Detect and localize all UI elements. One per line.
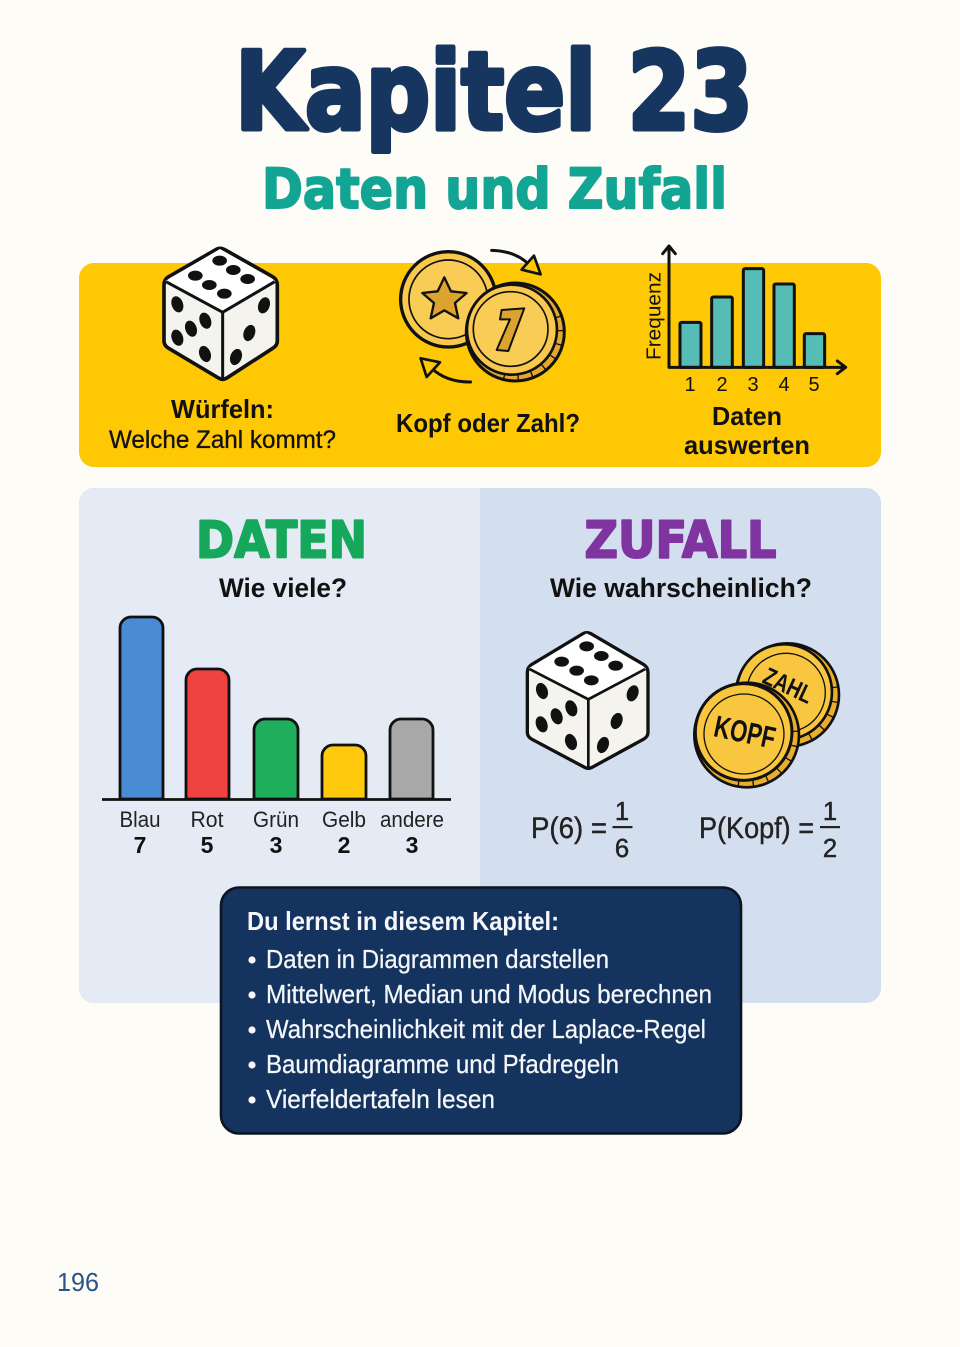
formula: P(6): 1 [615, 796, 629, 826]
formula: P(Kopf): 1 [823, 796, 837, 826]
heading: Zufall: ZUFALL [584, 512, 776, 570]
chart: frequency histogram: 2 [716, 374, 728, 396]
label: data: Daten [712, 401, 782, 431]
chart: frequency histogram [644, 246, 846, 396]
subheading: Daten: Wie viele? [219, 573, 347, 603]
icon: Kopf and Zahl coins: KOPF [711, 710, 778, 756]
subheading: Zufall: Wie wahrscheinlich? [550, 573, 812, 603]
icon: die [164, 248, 277, 379]
bar chart: colours [102, 617, 451, 800]
panel: yellow topic band [79, 263, 881, 467]
bar labels: 3 [270, 832, 282, 858]
formula: P(Kopf): P(Kopf) = [699, 812, 814, 845]
heading: Daten: DATEN [196, 512, 367, 570]
label: data [684, 401, 810, 460]
bar labels: Gelb [322, 807, 366, 832]
bar labels: andere [380, 807, 444, 832]
bar labels: Grün [253, 807, 299, 832]
callout list: Daten in Diagrammen darstellen [266, 944, 609, 974]
chart: frequency histogram: 4 [778, 374, 790, 396]
label: dice [109, 394, 336, 454]
bar labels: Blau [120, 807, 160, 832]
bar labels: 2 [338, 832, 350, 858]
bar labels: 5 [201, 832, 214, 858]
callout list: Baumdiagramme und Pfadregeln [266, 1049, 619, 1079]
callout: learning goals [221, 888, 741, 1134]
callout list: Wahrscheinlichkeit mit der Laplace-Regel [266, 1014, 706, 1044]
formula: P(Kopf) [699, 796, 840, 863]
callout list [248, 944, 712, 1114]
chart: frequency histogram: 5 [808, 374, 820, 396]
formula: P(6) [531, 796, 632, 863]
bar labels [120, 807, 444, 858]
icon: Kopf and Zahl coins: ZAHL [759, 662, 817, 710]
label: data: auswerten [684, 430, 810, 460]
label: dice: Würfeln: [171, 394, 274, 424]
icon: Kopf and Zahl coins [694, 643, 839, 787]
callout heading: Du lernst in diesem Kapitel: [247, 906, 559, 936]
bar labels: 3 [406, 832, 418, 858]
subtitle: Daten und Zufall [262, 157, 727, 221]
label: coin: Kopf oder Zahl? [396, 408, 580, 438]
chart: frequency histogram: 3 [747, 374, 759, 396]
chart: frequency histogram: Frequenz [644, 272, 666, 360]
title: Kapitel 23 [235, 30, 753, 155]
chart: frequency histogram: 1 [684, 374, 696, 396]
icon: probability die [527, 633, 648, 768]
panel: comparison background [79, 488, 881, 1003]
page number: 196 [57, 1267, 99, 1297]
bar labels: 7 [134, 832, 146, 858]
formula: P(Kopf): 2 [823, 833, 837, 863]
formula: P(6): P(6) = [531, 812, 607, 845]
label: dice: Welche Zahl kommt? [109, 426, 336, 454]
bar labels: Rot [190, 807, 224, 832]
callout list: Vierfeldertafeln lesen [266, 1084, 495, 1114]
callout list: Mittelwert, Median und Modus berechnen [266, 979, 712, 1009]
formula: P(6): 6 [615, 833, 629, 863]
icon: coins with flip arrows [401, 250, 564, 382]
